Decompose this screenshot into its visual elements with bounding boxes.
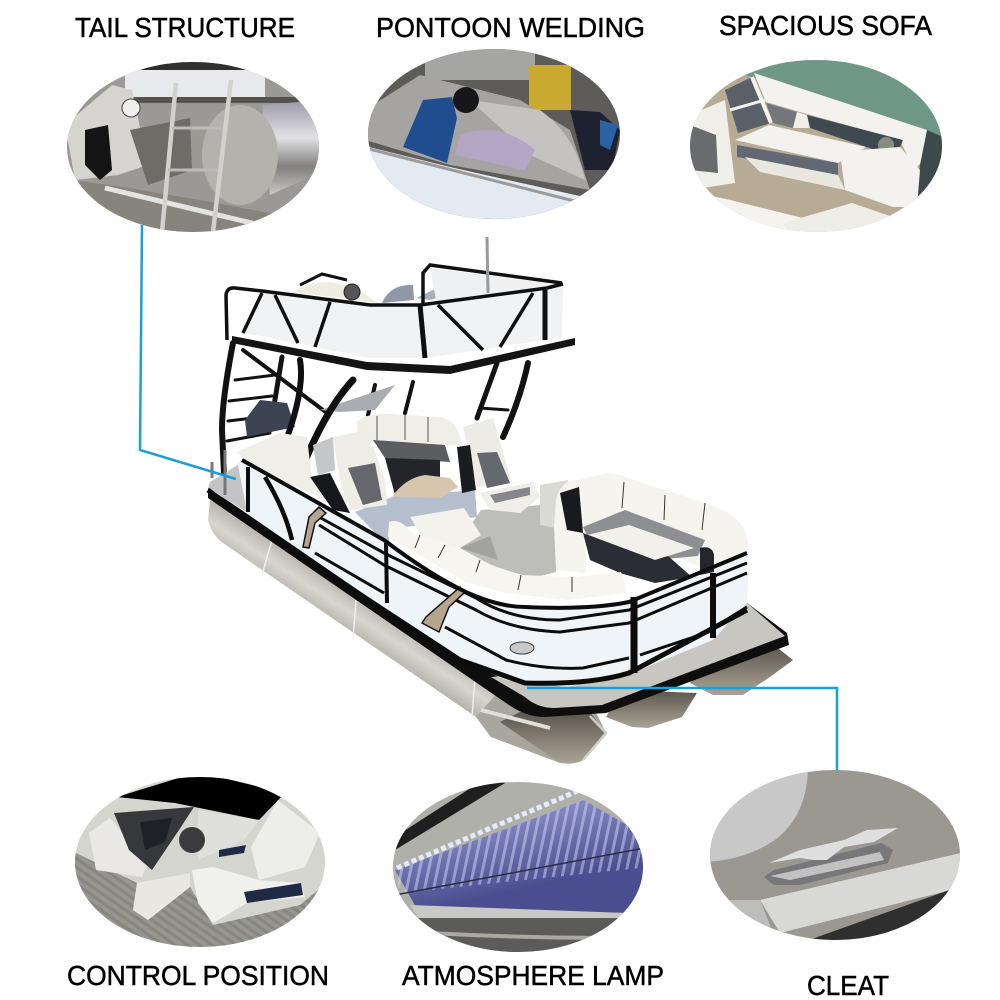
stern seating [237,414,462,505]
connector: tail structure [140,225,236,479]
title: tail structure: TAIL STRUCTURE [75,12,295,43]
title: spacious sofa: SPACIOUS SOFA [719,10,932,41]
label: control position: CONTROL POSITION [67,960,329,991]
photo: cleat [705,765,965,945]
port sofa [388,508,627,600]
upper deck: equipment behind panel [292,237,562,305]
label: atmosphere lamp: ATMOSPHERE LAMP [402,960,664,991]
rear rail posts [212,450,225,495]
deck edge [208,488,789,717]
photo: spacious sofa [685,55,950,235]
floor [455,505,556,578]
photo: atmosphere lamp [388,778,650,958]
helm chairs [310,418,540,513]
connector: cleat [527,688,837,776]
pontoons [208,500,793,764]
rail top over sofa [242,460,747,608]
upper deck panel [226,284,575,374]
bow sofa [540,473,749,583]
photo: tail structure [67,62,319,232]
boat [208,237,793,764]
tower arches [277,360,353,473]
hull side panels [208,460,748,687]
photo: control position [75,777,325,947]
console and dash [355,475,477,546]
tower frame, rear [222,343,528,495]
outboard motor [245,400,295,437]
photo: pontoon welding [368,49,620,219]
title: pontoon welding: PONTOON WELDING [376,12,645,43]
